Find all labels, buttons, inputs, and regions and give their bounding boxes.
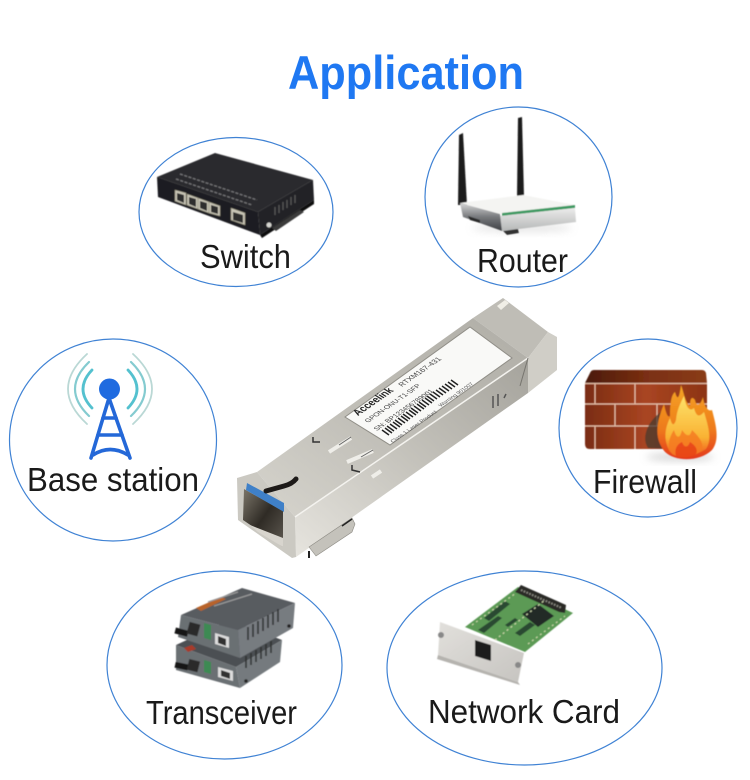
label: router: Router bbox=[477, 242, 568, 279]
panel: transceiver bbox=[107, 571, 342, 759]
label: switch: Switch bbox=[200, 238, 291, 275]
title: Application bbox=[288, 46, 524, 99]
label serial number: SN: BP123456789001 bbox=[373, 389, 436, 432]
icon: router bbox=[458, 117, 576, 235]
label: base station: Base station bbox=[27, 461, 199, 498]
hero: SFP optical module bbox=[237, 298, 557, 558]
barcode bbox=[382, 380, 458, 435]
label brand: Acceelink bbox=[350, 386, 397, 418]
icon: network card bbox=[437, 585, 573, 685]
icon: brick wall with flame bbox=[585, 370, 717, 461]
panel: router bbox=[425, 107, 612, 287]
optical port opening bbox=[243, 489, 283, 547]
label model: RTXM167-431 bbox=[396, 356, 444, 388]
front frame bbox=[237, 472, 296, 558]
panel: switch bbox=[139, 138, 333, 286]
blue strip bbox=[246, 483, 284, 512]
icon: media converters bbox=[174, 588, 295, 688]
panel: base station bbox=[10, 339, 216, 541]
label: firewall: Firewall bbox=[593, 463, 697, 500]
panel: firewall bbox=[559, 339, 737, 517]
label: transceiver: Transceiver bbox=[146, 694, 297, 731]
label: network card: Network Card bbox=[428, 693, 620, 730]
icon: signal tower bbox=[68, 354, 152, 458]
label date code: Warning 901007 bbox=[438, 382, 476, 408]
module rear cage side bbox=[528, 332, 557, 393]
panel: network card bbox=[387, 571, 662, 765]
bottom connector bbox=[309, 518, 355, 556]
module top face bbox=[257, 318, 528, 517]
module side face bbox=[295, 358, 528, 557]
product label bbox=[345, 327, 512, 445]
label compliance text: Class 1 Laser Product bbox=[390, 410, 439, 444]
icon: network switch bbox=[157, 153, 314, 238]
latch bbox=[266, 479, 296, 491]
label part number: GPON-ONU-T1-SFP bbox=[364, 383, 423, 424]
top face vents bbox=[313, 394, 506, 477]
module rear cage top bbox=[473, 298, 548, 358]
